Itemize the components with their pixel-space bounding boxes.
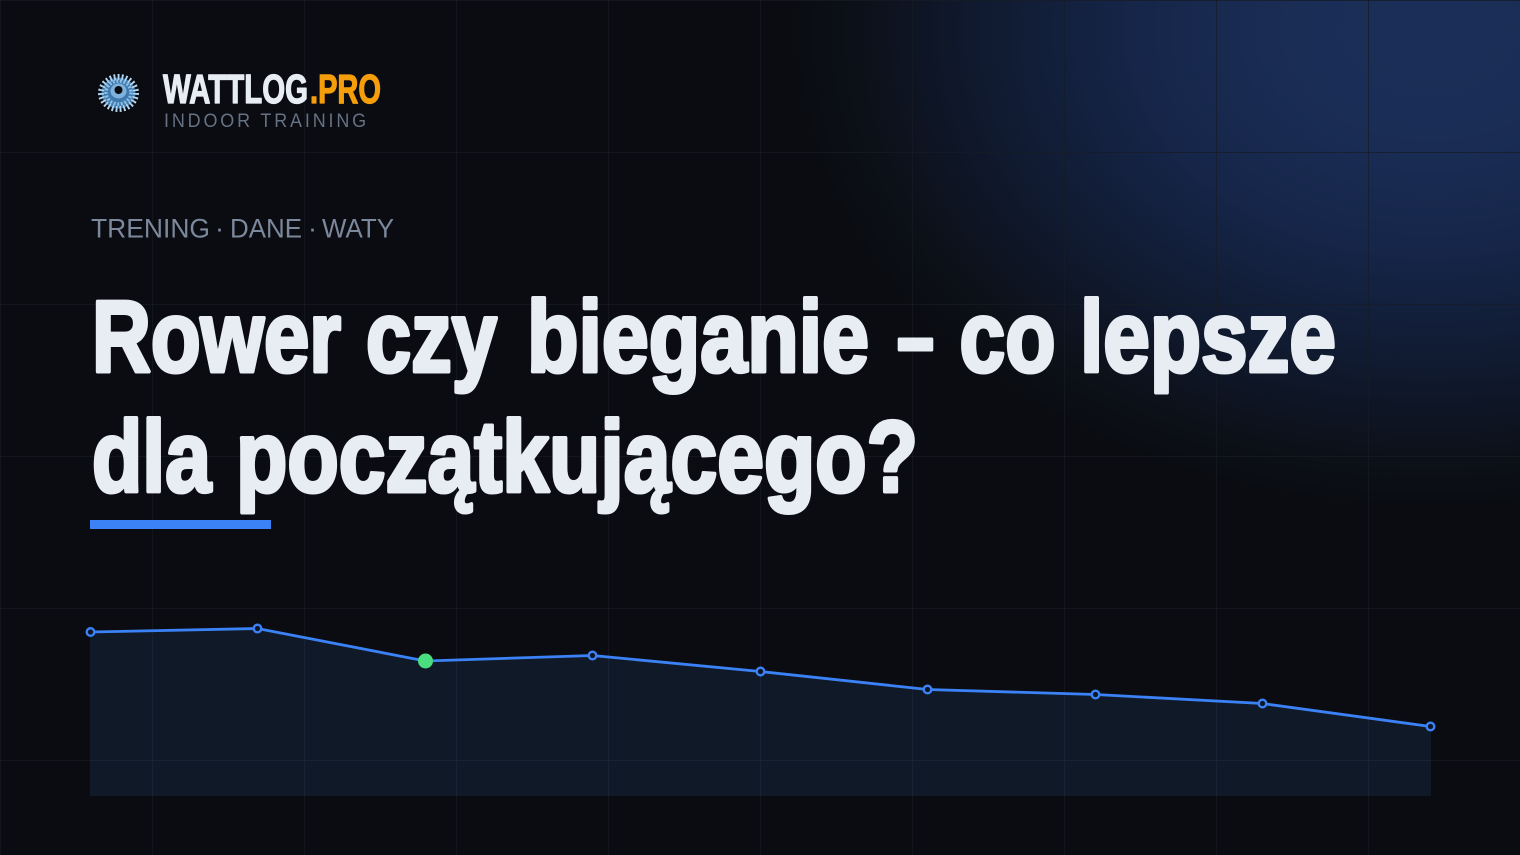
chart area fill (90, 628, 1431, 796)
chart markers (87, 625, 1434, 730)
eyebrow text: WATY (322, 214, 394, 244)
title line 1: – (897, 280, 934, 394)
title line 1: co (960, 280, 1056, 394)
eyebrow text: DANE (230, 214, 302, 244)
eyebrow text: · (215, 214, 224, 244)
line chart (87, 625, 1434, 796)
logo wordmark: .PRO (310, 66, 381, 112)
title line 1: bieganie (527, 280, 869, 394)
title line 1: czy (366, 280, 497, 394)
title line 2: początkującego? (236, 400, 918, 514)
eyebrow text: · (308, 214, 317, 244)
title line 1: lepsze (1080, 280, 1336, 394)
eyebrow text: TRENING (91, 214, 210, 244)
highlighted green marker (418, 654, 433, 668)
icon: cassette gear logo (101, 77, 136, 109)
logo tagline: INDOOR TRAINING (164, 111, 369, 132)
title line 2: dla (92, 400, 212, 514)
title accent underline (90, 520, 271, 529)
title line 1: Rower (92, 280, 341, 394)
chart line (90, 628, 1430, 726)
logo wordmark: WATTLOG (163, 66, 308, 112)
